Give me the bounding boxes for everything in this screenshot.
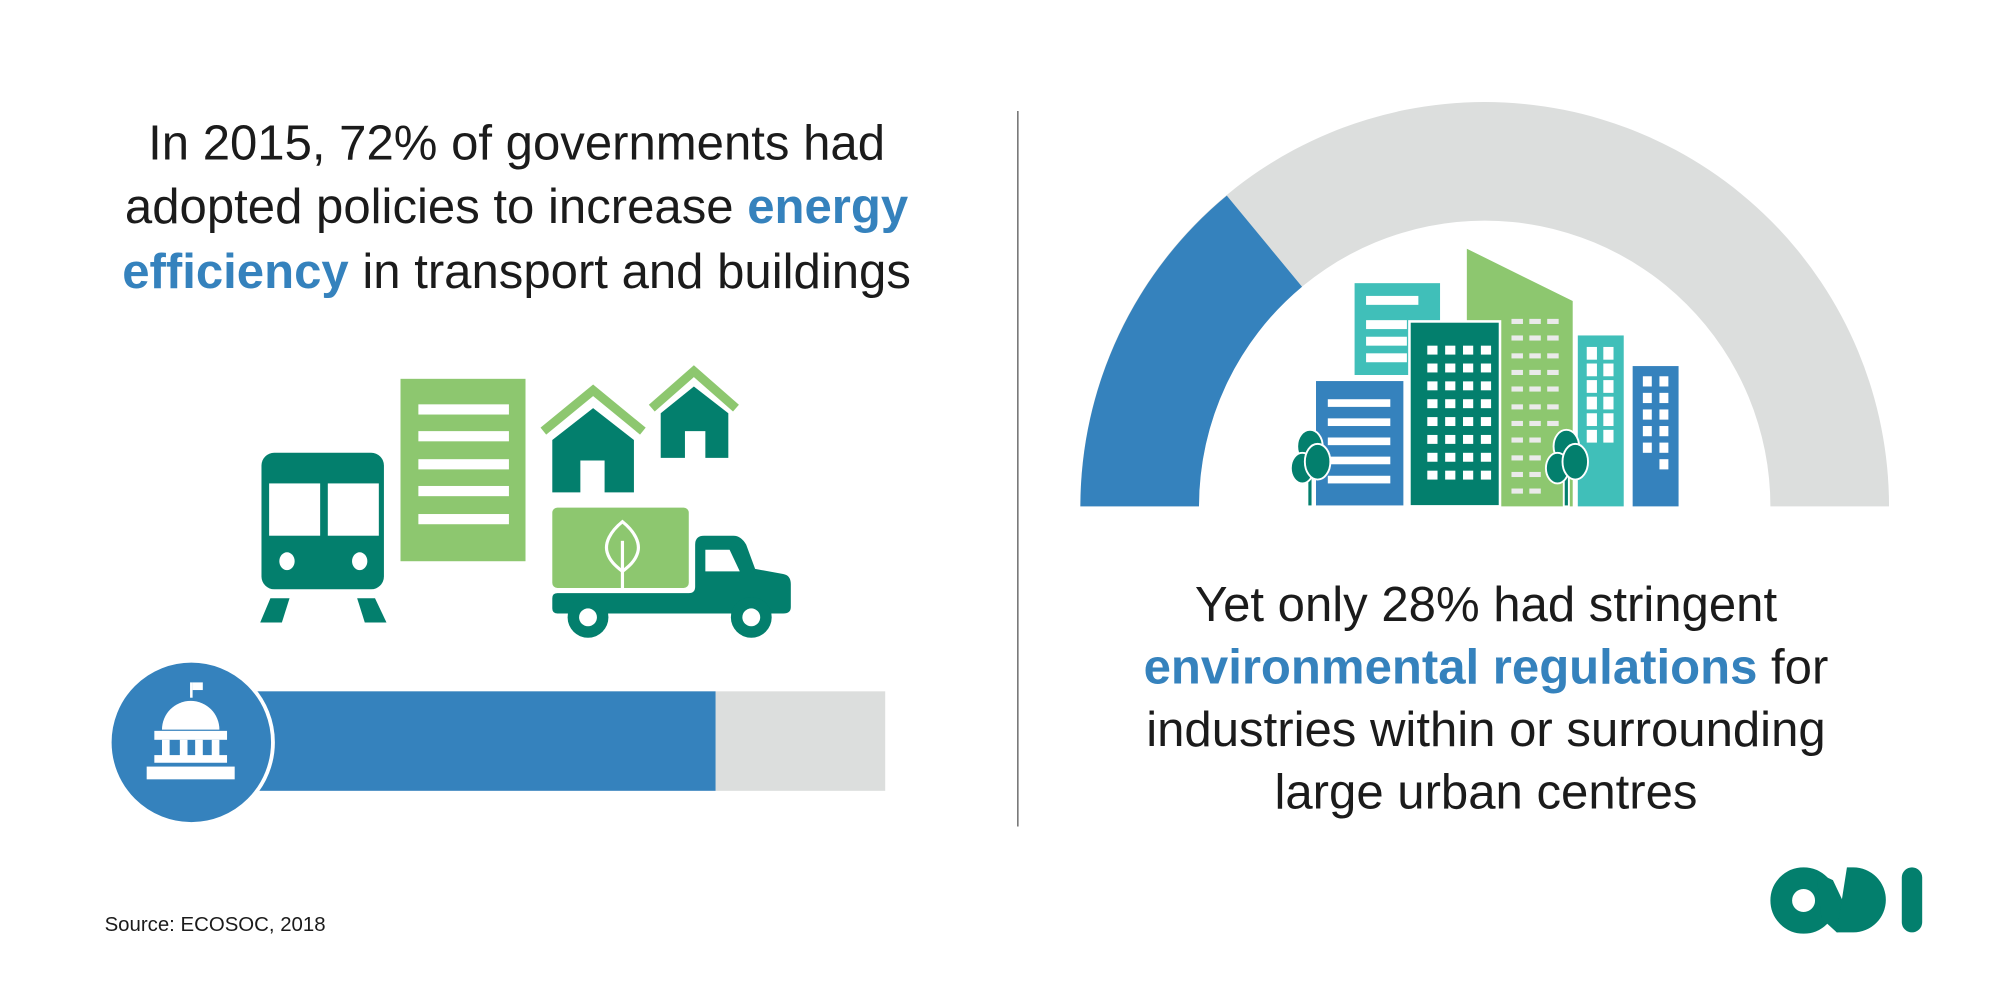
logo: ODI <box>1781 867 1922 932</box>
text: right statement <box>1144 578 1828 820</box>
text: right statement: industries within or surrounding <box>1146 703 1826 757</box>
title: left statement: In 2015, 72% of governments had <box>148 116 885 170</box>
icon: house 1 <box>543 390 643 492</box>
bar chart: 72% <box>242 691 885 791</box>
chart: semicircle gauge 28% <box>1080 102 1889 506</box>
icon: government building circle <box>110 661 273 824</box>
title: left statement: adopted policies to increase energy <box>125 180 909 234</box>
text: right statement: Yet only 28% had stringent <box>1195 578 1777 632</box>
icon: house 2 <box>652 371 736 458</box>
title: left statement: efficiency in transport and buildings <box>122 245 911 299</box>
icon: green office building <box>401 379 526 561</box>
text: right statement: large urban centres <box>1274 766 1697 820</box>
title: left statement <box>122 116 911 299</box>
icon: delivery truck with leaf <box>552 508 791 638</box>
icon: train <box>260 453 386 622</box>
text: right statement: environmental regulations for <box>1144 641 1828 695</box>
source note: Source: ECOSOC, 2018 <box>105 914 326 936</box>
icon: city skyline <box>1291 249 1679 506</box>
